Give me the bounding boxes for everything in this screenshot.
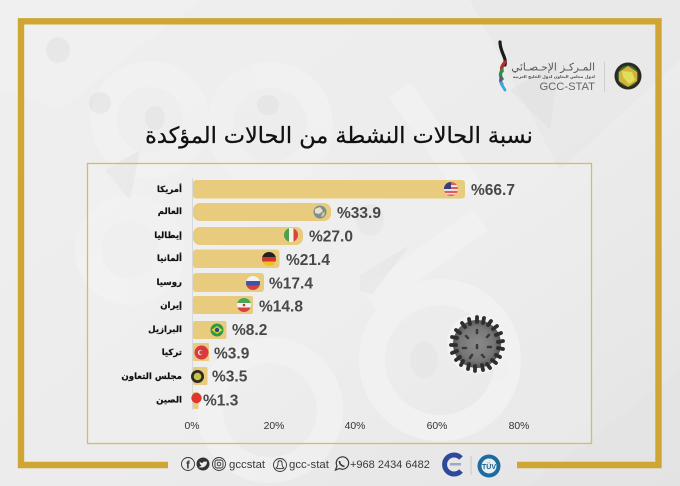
icon: facebook: f [186,460,190,472]
row: Turkey: تركيا [162,348,182,358]
row: GCC: مجلس التعاون [121,372,182,382]
icon: GCC emblem small [191,370,204,383]
row: Iran [160,296,303,316]
row: Germany [157,250,330,269]
row: Iran: إيران [160,301,182,311]
x axis labels: 20% [264,421,284,432]
row: World [158,203,381,222]
logo arabic name: المـركـز الإحـصـائي [511,62,595,74]
logo: GCC emblem [614,62,642,90]
icon: China flag [191,393,202,403]
icon: Turkey flag [194,346,208,360]
row: Italy: %27.0 [309,228,353,246]
row: Turkey: %3.9 [214,346,250,362]
icon: Brazil flag [210,324,224,336]
logo latin name: GCC-STAT [539,81,595,93]
icon: Russia flag [246,276,260,290]
row: USA: %66.7 [471,182,515,199]
icon: whatsapp [336,457,349,470]
row: USA: أمريكا [157,183,182,195]
row: World: العالم [158,207,182,217]
row: Russia: %17.4 [269,276,313,292]
title: نسبة الحالات النشطة من الحالات المؤكدة [145,123,533,149]
x axis labels: 60% [427,421,447,432]
row: China: الصين [156,396,182,406]
logo ribbon [500,42,505,90]
row: Russia: روسيا [157,278,182,288]
row: GCC: %3.5 [212,368,248,386]
row: China: %1.3 [203,392,239,410]
x axis labels: 80% [509,421,529,432]
row: USA [157,180,515,199]
row: Brazil: البرازيل [148,325,182,335]
row: China [156,392,239,410]
row: Germany: ألمانيا [157,252,182,264]
icon: US flag [444,182,458,196]
icon: certification mark [445,455,461,474]
icon: coronavirus [447,314,507,374]
row: Brazil: %8.2 [232,322,267,339]
handle: gcc-stat: gcc-stat [289,459,330,471]
row: Turkey [162,343,250,362]
logo arabic subtitle: لدول مجلس التعاون لدول الخليج العربية [513,74,595,79]
icon: snapchat [274,458,286,472]
x axis labels [184,421,529,432]
icon: Italy flag [284,228,298,242]
x axis labels: 0% [184,421,200,432]
logo: GCC-STAT [500,42,595,93]
phone number: +968 2434 6482 [350,459,430,471]
handle: gccstat: gccstat [229,459,266,471]
icon: twitter [196,458,210,470]
divider in logo [604,62,605,92]
icon: TUV badge [478,454,500,478]
row: GCC [121,367,248,386]
axis line [192,178,193,410]
row: Italy [154,227,353,246]
row: Germany: %21.4 [286,252,330,269]
row: Italy: إيطاليا [154,231,182,241]
row: World: %33.9 [337,205,381,222]
row: Iran: %14.8 [259,298,303,316]
footer [182,454,500,478]
row: Russia [157,273,313,292]
icon: facebook [182,458,194,472]
icon: TUV badge: TÜV [482,462,496,471]
icon: Germany flag [262,252,276,266]
x axis labels: 40% [345,421,365,432]
icon: instagram [212,458,226,470]
row: Brazil [148,321,267,339]
panel: chart [88,164,592,444]
icon: globe [314,206,326,218]
icon: Iran flag [237,298,251,312]
